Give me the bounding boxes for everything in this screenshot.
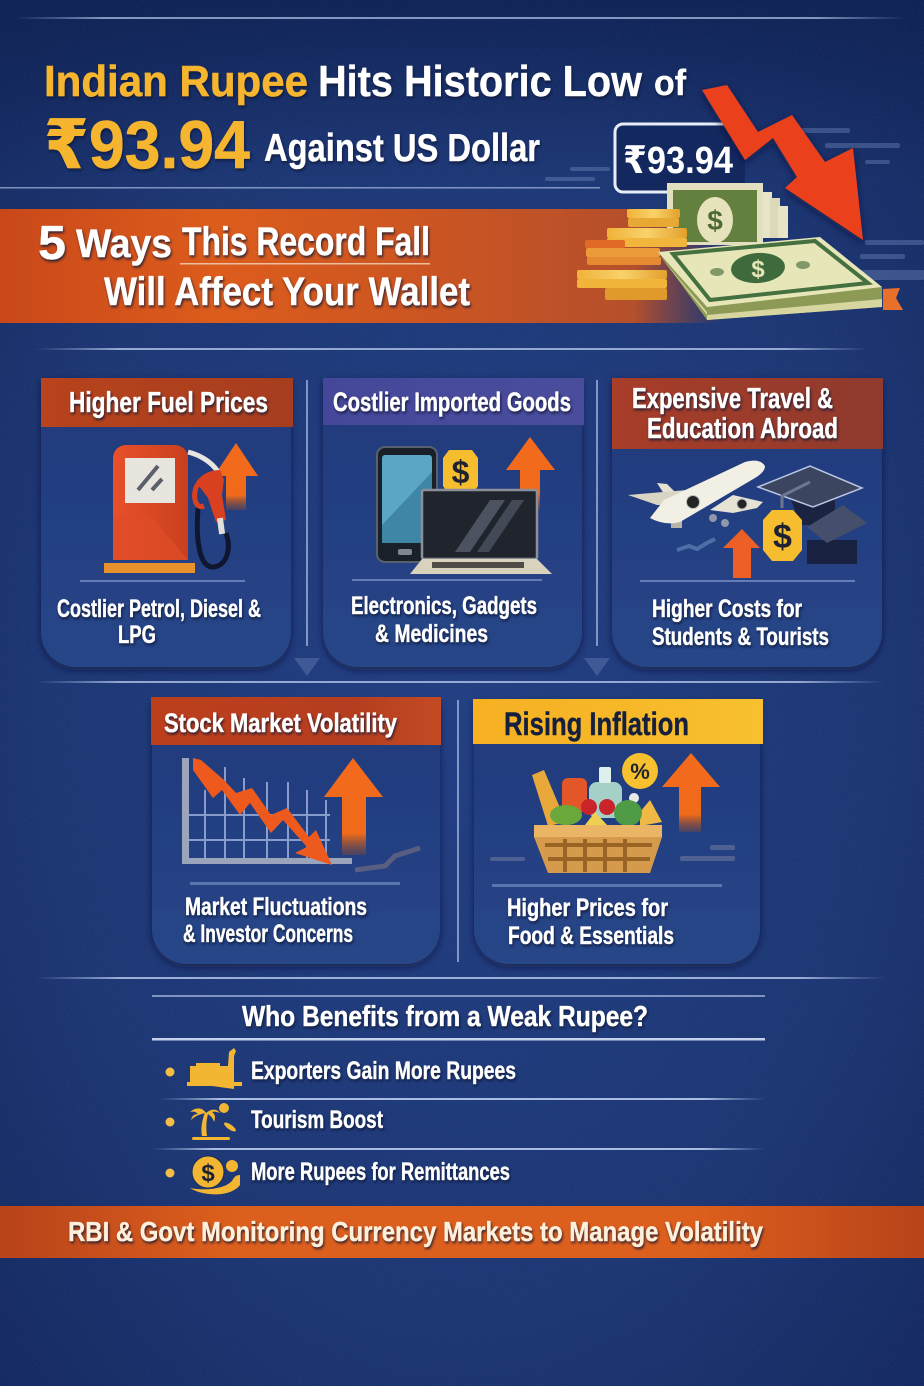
- panel: higher fuel prices: [41, 378, 293, 667]
- caption: Costlier Petrol, Diesel &: [57, 595, 261, 623]
- icon: dollar tag: $: [452, 454, 470, 490]
- caption: LPG: [118, 621, 156, 649]
- title: Against US Dollar: [264, 127, 540, 170]
- heading: Rising Inflation: [504, 706, 689, 742]
- illustration: price tag box: [615, 124, 745, 192]
- icon: fuel pump: [104, 445, 228, 573]
- decorative trace: [355, 848, 420, 870]
- illustration: falling red arrow: [702, 85, 863, 240]
- title: Hits Historic Low: [318, 57, 643, 106]
- illustration: money and coins: [577, 183, 903, 320]
- caption: Food & Essentials: [508, 922, 674, 950]
- benefit: remittances: $: [201, 1160, 215, 1187]
- caption: Higher Costs for: [652, 595, 802, 623]
- subtitle banner: 5: [38, 217, 66, 270]
- divider: first row right: [596, 380, 598, 646]
- caption: [57, 595, 261, 649]
- icon: dollar tag: [443, 450, 478, 495]
- caption: Electronics, Gadgets: [351, 592, 537, 620]
- benefit: remittances: More Rupees for Remittances: [251, 1158, 510, 1186]
- benefit: remittances: [166, 1156, 510, 1194]
- divider: first row left: [306, 380, 308, 646]
- caption: Market Fluctuations: [185, 893, 367, 921]
- row rule: [36, 681, 884, 683]
- header: [612, 378, 883, 449]
- illustration: money and coins: $: [707, 205, 723, 236]
- icon: up arrow: [214, 443, 258, 510]
- header: [41, 378, 293, 427]
- subtitle banner: Ways: [76, 222, 172, 266]
- caption: [351, 592, 537, 648]
- caption: [507, 894, 674, 950]
- section rule: [36, 348, 868, 350]
- icon: grocery basket: %: [630, 759, 650, 784]
- icon: dollar tag: [763, 510, 802, 561]
- icon: graduation cap: [758, 466, 867, 564]
- header: [151, 697, 441, 745]
- panel: expensive travel and education: [612, 378, 883, 667]
- icon: up arrow: [723, 529, 760, 578]
- illustration: price tag box: ₹93.94: [623, 140, 733, 182]
- subtitle banner: Will Affect Your Wallet: [104, 270, 470, 314]
- panel: rising inflation: [473, 699, 763, 964]
- divider: second row: [457, 700, 459, 962]
- heading: Higher Fuel Prices: [69, 387, 268, 419]
- header: [473, 699, 763, 744]
- section rule: [36, 977, 885, 979]
- icon: up arrow: [506, 437, 555, 510]
- icon: up arrow: [324, 758, 383, 855]
- caption: & Medicines: [375, 620, 488, 648]
- footer banner: RBI & Govt Monitoring Currency Markets to Manage Volatility: [68, 1216, 763, 1247]
- title rule: [0, 187, 600, 188]
- footer banner: [0, 1206, 924, 1258]
- caption: Students & Tourists: [652, 623, 829, 651]
- decorative traces: [490, 845, 735, 861]
- icon: faint right triangle: [584, 658, 610, 676]
- icon: airplane: [628, 461, 765, 528]
- benefit: tourism: [166, 1103, 384, 1140]
- heading: Who Benefits from a Weak Rupee?: [242, 1001, 648, 1033]
- subtitle banner: This Record Fall: [182, 220, 430, 264]
- heading: [632, 383, 838, 445]
- title: ₹93.94: [44, 107, 250, 183]
- caption: & Investor Concerns: [183, 920, 353, 948]
- icon: grocery basket: [532, 753, 662, 873]
- icon: smartphone: [377, 447, 437, 562]
- decorative trace: [677, 539, 715, 550]
- title: [44, 57, 687, 183]
- icon: dollar tag: $: [773, 518, 792, 556]
- heading: Education Abroad: [647, 413, 838, 445]
- caption: [652, 595, 829, 651]
- chart: falling market: [182, 758, 352, 865]
- icon: up arrow: [662, 753, 720, 832]
- caption: [183, 893, 367, 948]
- title: Indian Rupee: [44, 57, 308, 106]
- decorative chart smudges: [545, 128, 924, 280]
- icon: laptop: [410, 490, 552, 574]
- illustration: money and coins: $: [751, 256, 765, 283]
- heading: Expensive Travel &: [632, 383, 833, 415]
- panel: who benefits: [152, 995, 765, 1194]
- heading: Costlier Imported Goods: [333, 387, 571, 417]
- subtitle banner: [0, 209, 720, 323]
- benefit: exporters: [166, 1048, 516, 1089]
- title: of: [654, 62, 687, 103]
- heading: Stock Market Volatility: [164, 708, 397, 738]
- caption: Higher Prices for: [507, 894, 668, 922]
- benefit: tourism: Tourism Boost: [251, 1106, 384, 1134]
- header: [323, 378, 584, 425]
- top rule: [15, 17, 905, 19]
- panel: stock market volatility: [151, 697, 441, 964]
- icon: faint left triangle: [294, 658, 320, 676]
- panel: costlier imported goods: [323, 378, 584, 667]
- benefit: exporters: Exporters Gain More Rupees: [251, 1057, 516, 1085]
